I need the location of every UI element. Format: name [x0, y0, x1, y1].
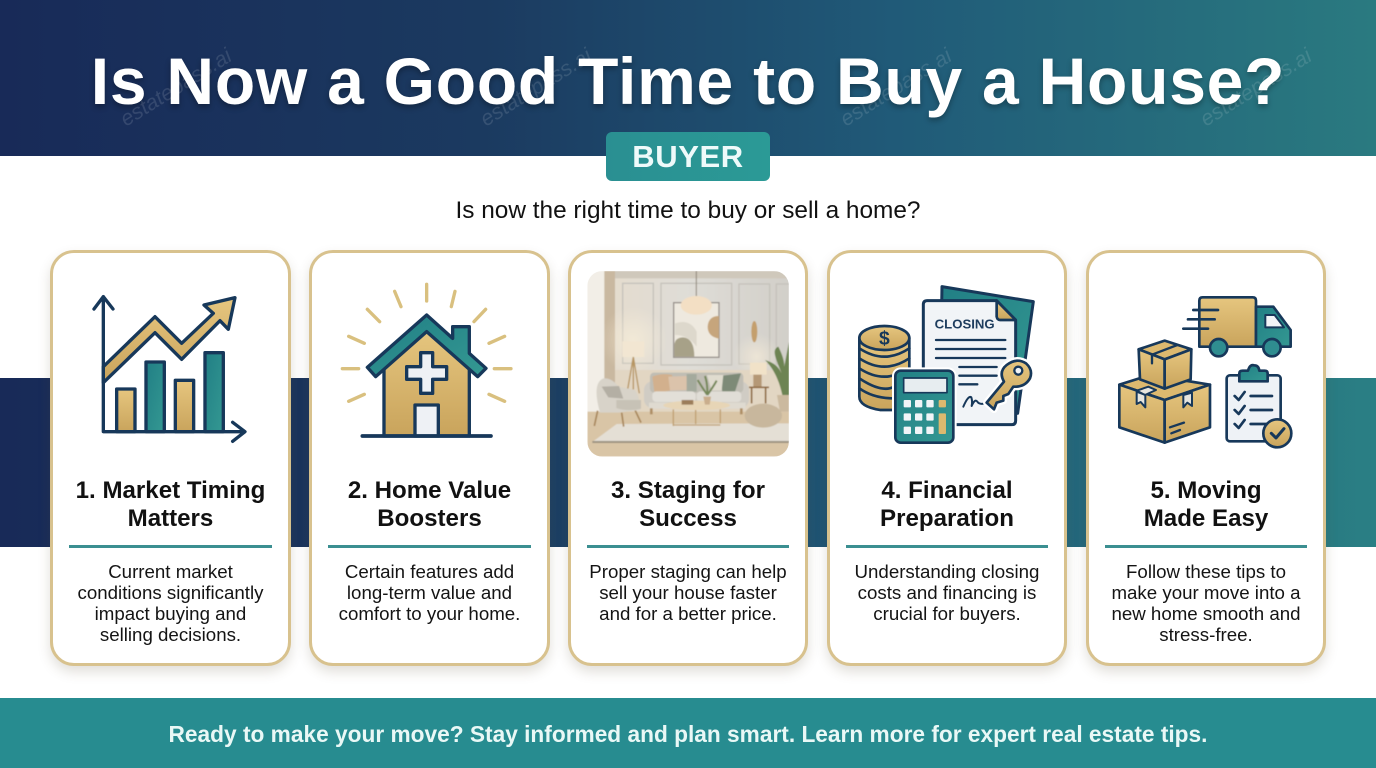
body text: Current market — [108, 561, 233, 582]
key — [987, 361, 1031, 409]
icon: closing documents: $ — [879, 329, 890, 350]
body text: costs and financing is — [858, 582, 1036, 603]
divider — [1105, 545, 1307, 548]
badge: buyer — [606, 132, 770, 181]
body text: Proper staging can help — [589, 561, 787, 582]
panel: market timing — [50, 250, 291, 666]
heading: Matters — [128, 505, 213, 532]
heading: Preparation — [880, 505, 1014, 532]
body text — [1111, 561, 1301, 645]
body text: stress-free. — [1159, 624, 1253, 645]
body text — [855, 561, 1039, 624]
heading: Boosters — [377, 505, 482, 532]
heading — [880, 477, 1014, 532]
body text: conditions significantly — [78, 582, 263, 603]
coins — [859, 326, 909, 410]
footer banner — [0, 698, 1376, 768]
heading: 1. Market Timing — [76, 477, 265, 504]
panel: financial preparation — [827, 250, 1067, 666]
body text: make your move into a — [1111, 582, 1301, 603]
heading: Made Easy — [1144, 505, 1268, 532]
body text: Understanding closing — [855, 561, 1039, 582]
body text: comfort to your home. — [339, 603, 520, 624]
calculator — [894, 369, 955, 444]
heading — [1144, 477, 1268, 532]
body text: sell your house faster — [599, 582, 777, 603]
body text: crucial for buyers. — [873, 603, 1021, 624]
icon: closing documents — [859, 287, 1033, 444]
divider — [328, 545, 531, 548]
truck — [1199, 297, 1256, 347]
background band — [0, 378, 1376, 547]
watermark: estatepass.ai — [116, 44, 236, 131]
badge: buyer: BUYER — [632, 139, 744, 174]
watermark: estatepass.ai — [836, 44, 956, 131]
body text: impact buying and — [95, 603, 246, 624]
header banner — [0, 0, 1376, 156]
icon: house with rays — [342, 284, 511, 436]
title: Is Now a Good Time to Buy a House? — [91, 44, 1285, 118]
body text: selling decisions. — [100, 624, 241, 645]
heading: 2. Home Value — [348, 477, 511, 504]
subtitle: Is now the right time to buy or sell a home? — [455, 197, 920, 224]
body text: long-term value and — [347, 582, 512, 603]
body text: Certain features add — [345, 561, 514, 582]
panel: home value boosters — [309, 250, 550, 666]
body text: new home smooth and — [1111, 603, 1301, 624]
heading — [348, 477, 511, 532]
heading: 4. Financial — [881, 477, 1013, 504]
divider — [69, 545, 272, 548]
body text: Follow these tips to — [1126, 561, 1286, 582]
heading — [76, 477, 265, 532]
watermark: estatepass.ai — [476, 44, 596, 131]
heading — [611, 477, 765, 532]
panel: staging for success — [568, 250, 808, 666]
body text — [589, 561, 787, 624]
heading: 5. Moving — [1150, 477, 1262, 504]
footer text: Ready to make your move? Stay informed and plan smart. Learn more for expert real estate tips. — [169, 721, 1207, 747]
heading: Success — [639, 505, 737, 532]
watermark: estatepass.ai — [1196, 44, 1316, 131]
icons layer — [92, 271, 1293, 457]
heading: 3. Staging for — [611, 477, 765, 504]
upper box — [1139, 341, 1191, 359]
divider — [587, 545, 789, 548]
icon: moving boxes, truck and checklist — [1119, 297, 1291, 447]
image: staged living room — [587, 271, 793, 457]
body text: and for a better price. — [599, 603, 777, 624]
document label: CLOSING — [935, 317, 995, 332]
clipboard — [1227, 375, 1281, 441]
panel: moving made easy — [1086, 250, 1326, 666]
back folder — [940, 287, 1033, 413]
body text — [78, 561, 264, 645]
divider — [846, 545, 1048, 548]
icon: growth chart — [94, 297, 245, 441]
document — [923, 301, 1016, 425]
body text — [339, 561, 520, 624]
lower box — [1119, 375, 1210, 400]
